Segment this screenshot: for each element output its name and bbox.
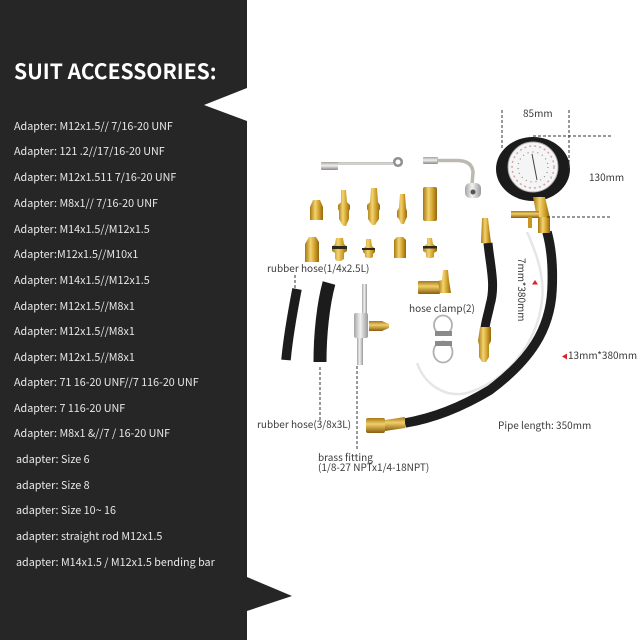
gauge scale bbox=[512, 146, 554, 188]
gauge brass tee fitting bbox=[533, 197, 550, 218]
icon: red marker main hose bbox=[562, 354, 567, 360]
accessory list: Adapter: M8x1 &//7 / 16-20 UNF bbox=[14, 426, 170, 441]
icon: red marker small tube bbox=[532, 280, 538, 284]
accessory list: Adapter: M12x1.5// 7/16-20 UNF bbox=[14, 119, 173, 134]
rubber hose long bbox=[320, 283, 329, 362]
icon: hose clamps bbox=[434, 316, 452, 362]
label: brass fitting: (1/8-27 NPTx1/4-18NPT) bbox=[318, 459, 429, 474]
label: brass fitting: brass fitting bbox=[318, 449, 373, 464]
label: rubber hose 3/8: rubber hose(3/8x3L) bbox=[257, 416, 351, 431]
panel: suit accessories bbox=[0, 0, 292, 640]
small black hose with brass end bbox=[478, 218, 493, 362]
label: 7mm 380mm: 7mm*380mm bbox=[515, 258, 530, 322]
gauge face bbox=[508, 142, 558, 192]
accessory list: Adapter: M12x1.511 7/16-20 UNF bbox=[14, 170, 176, 185]
gauge needle bbox=[532, 154, 537, 180]
icon: brass elbow bbox=[418, 270, 451, 294]
accessory list: Adapter: 7 116-20 UNF bbox=[14, 401, 125, 416]
label: rubber hose 1/4: rubber hose(1/4x2.5L) bbox=[267, 260, 369, 275]
accessory list: adapter: M14x1.5 / M12x1.5 bending bar bbox=[16, 555, 216, 570]
icon: aluminium T fitting bbox=[354, 284, 389, 365]
dimension lines bbox=[295, 110, 612, 450]
label: pipe length: Pipe length: 350mm bbox=[498, 417, 591, 432]
main hose brass end bbox=[366, 417, 405, 433]
gauge bbox=[496, 137, 570, 233]
main hose bbox=[405, 232, 552, 423]
label: 85mm: 85mm bbox=[523, 105, 553, 120]
accessory list: Adapter: M14x1.5//M12x1.5 bbox=[14, 222, 150, 237]
accessory list bbox=[14, 119, 216, 570]
accessory list: Adapter: M12x1.5//M8x1 bbox=[14, 299, 135, 314]
accessory list: Adapter: M14x1.5//M12x1.5 bbox=[14, 273, 150, 288]
accessory list: adapter: straight rod M12x1.5 bbox=[16, 529, 162, 544]
accessory list: Adapter: 71 16-20 UNF//7 116-20 UNF bbox=[14, 375, 199, 390]
accessory list: adapter: Size 6 bbox=[16, 452, 90, 467]
panel background with arrow notches bbox=[0, 0, 292, 640]
label: 130mm: 130mm bbox=[589, 169, 624, 184]
accessory list: Adapter: M12x1.5//M8x1 bbox=[14, 324, 135, 339]
accessory list: Adapter: M12x1.5//M8x1 bbox=[14, 350, 135, 365]
accessory list: adapter: Size 8 bbox=[16, 478, 90, 493]
icon: straight banjo rod bbox=[321, 158, 402, 170]
label: 13mm 380mm: 13mm*380mm bbox=[568, 347, 637, 362]
gauge body bbox=[496, 137, 570, 201]
accessory list: Adapter: 121 .2//17/16-20 UNF bbox=[14, 144, 165, 159]
label: hose clamp: hose clamp(2) bbox=[409, 300, 475, 315]
accessory list: Adapter: M8x1// 7/16-20 UNF bbox=[14, 196, 158, 211]
accessory list: adapter: Size 10~ 16 bbox=[16, 503, 116, 518]
accessory list: Adapter:M12x1.5//M10x1 bbox=[14, 247, 138, 262]
clear tube bbox=[417, 232, 543, 394]
rubber hose short bbox=[286, 289, 297, 360]
label: brass fitting bbox=[318, 449, 429, 474]
icon: bent rod bbox=[423, 157, 481, 198]
heading: SUIT ACCESSORIES: bbox=[14, 56, 217, 86]
brass adapters bbox=[305, 187, 437, 262]
